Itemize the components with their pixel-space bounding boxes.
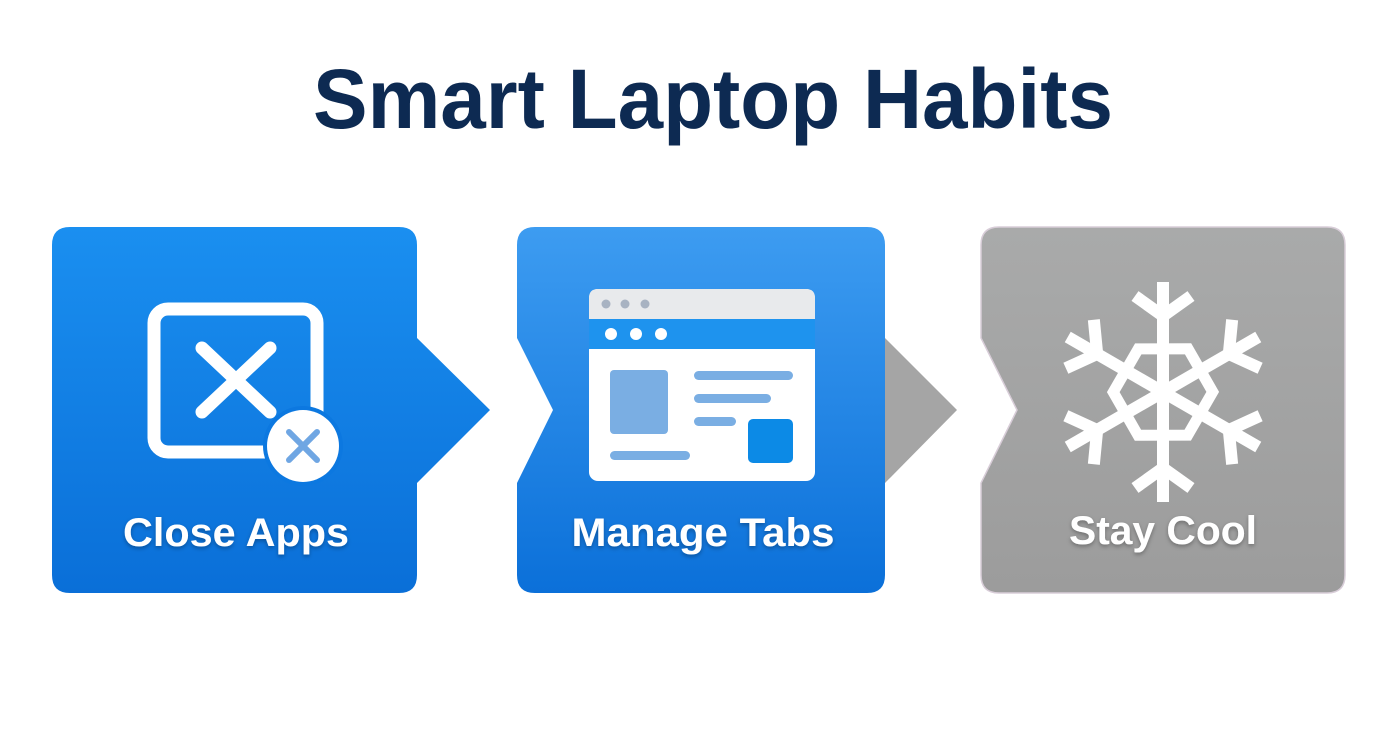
label: close apps: Close Apps: [123, 511, 349, 555]
label: manage tabs: Manage Tabs: [572, 511, 834, 555]
icon: closed window: [154, 309, 343, 486]
title: Smart Laptop Habits: [313, 52, 1113, 146]
icon: snowflake: [1054, 282, 1272, 502]
panel: close apps: [52, 227, 490, 593]
label: stay cool: Stay Cool: [1069, 509, 1257, 553]
panel: stay cool: [981, 227, 1345, 593]
icon: browser window: [589, 289, 815, 481]
arrow: grey connector: [885, 338, 957, 483]
panel: manage tabs: [517, 227, 885, 593]
